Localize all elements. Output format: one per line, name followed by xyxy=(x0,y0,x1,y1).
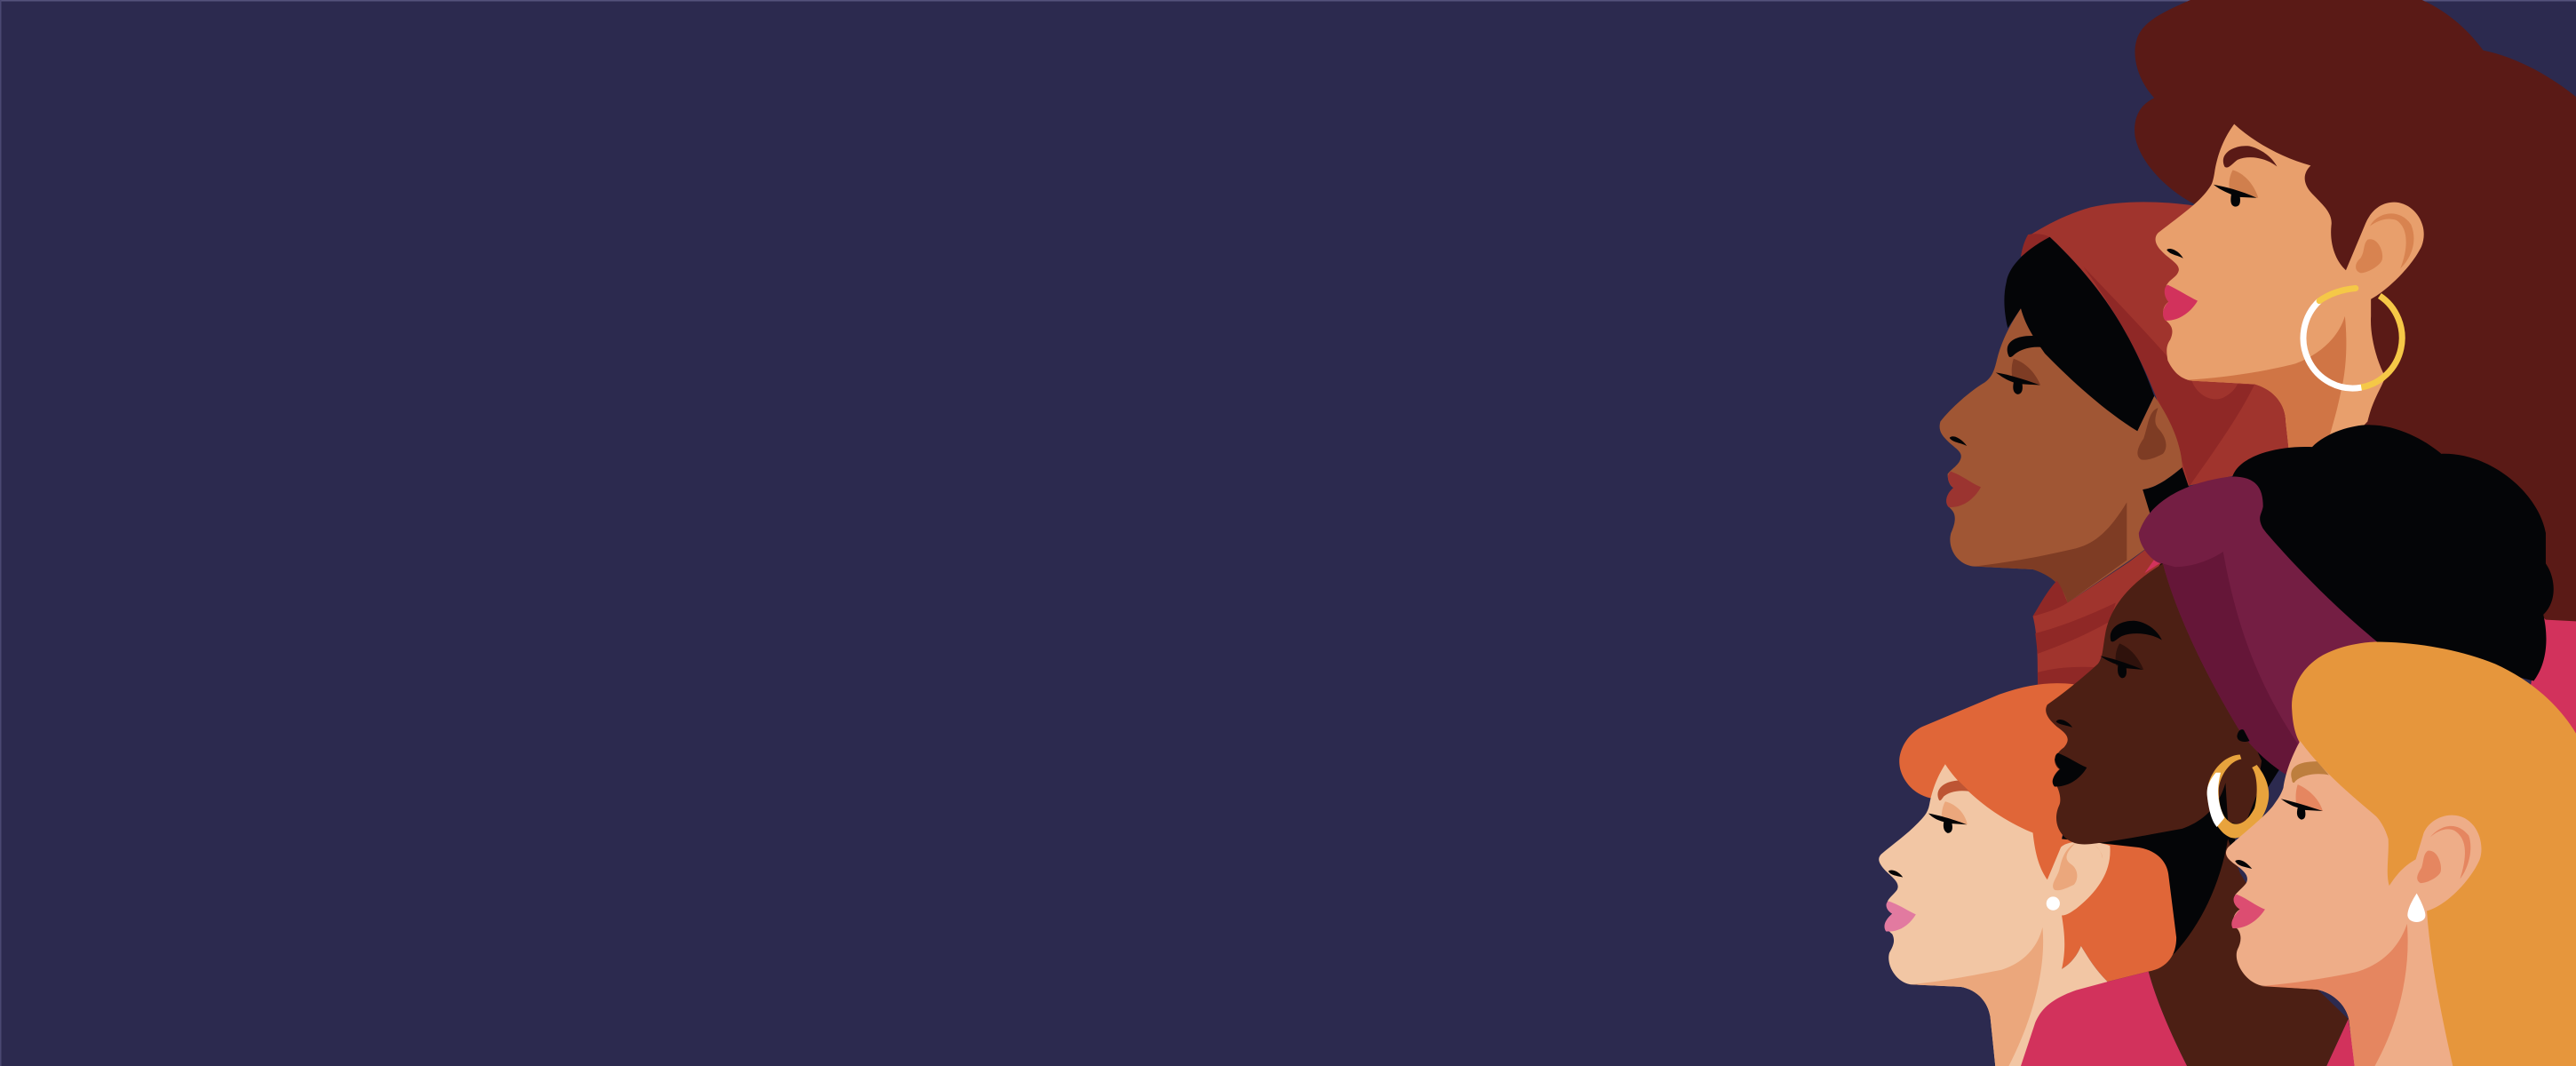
woman 5: long blonde hair, drop earring xyxy=(2226,641,2576,1066)
woman 3 front: dark skin, purple headband, gold hoop xyxy=(2046,476,2377,845)
woman 4: orange bob hair, pearl earring xyxy=(1879,683,2187,1066)
gold hoop xyxy=(2207,754,2269,839)
hoop earring xyxy=(2303,288,2402,388)
woman 1: long auburn hair, hoop earring xyxy=(2135,0,2576,884)
woman 3 back: black bun hair xyxy=(2062,425,2554,1066)
woman 2: headscarf, black hair, brown skin xyxy=(1940,202,2322,684)
